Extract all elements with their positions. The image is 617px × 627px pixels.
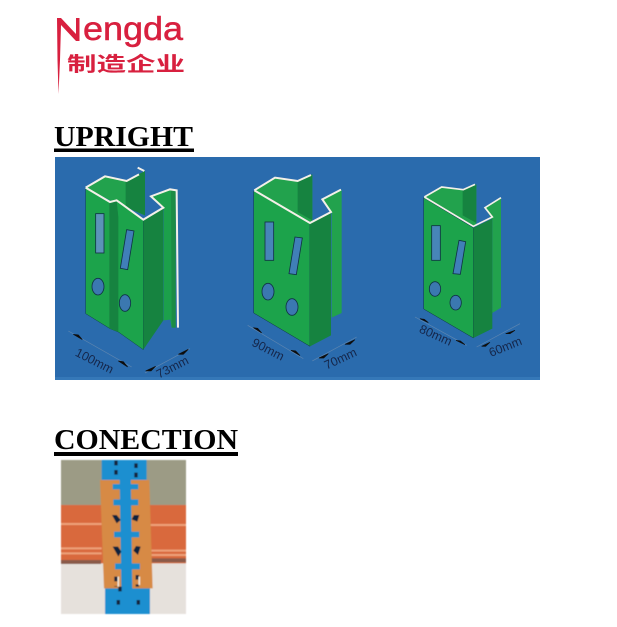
- panel: upright profiles: [55, 157, 540, 381]
- upright 100mm x 73mm: 100mm: [73, 346, 116, 377]
- heading: CONECTION: CONECTION: [54, 424, 238, 456]
- logo N with long tapered stem: [57, 18, 80, 94]
- upright 100mm x 73mm: 73mm: [154, 353, 191, 381]
- upright 100mm x 73mm: [68, 168, 191, 381]
- logo wordmark: engda: [83, 10, 184, 47]
- photo: beam connection: [61, 460, 186, 614]
- upright 90mm x 70mm: 70mm: [322, 345, 359, 372]
- upright 90mm x 70mm: 90mm: [250, 336, 287, 364]
- upright 80mm x 60mm: 60mm: [487, 334, 524, 360]
- heading: UPRIGHT: UPRIGHT: [54, 121, 193, 153]
- upright 90mm x 70mm: [248, 174, 359, 372]
- upright 80mm x 60mm: 80mm: [417, 322, 454, 349]
- upright 80mm x 60mm: [415, 184, 524, 360]
- logo: Nengda: [57, 10, 185, 94]
- logo Chinese tagline: 制造企业: [67, 52, 185, 76]
